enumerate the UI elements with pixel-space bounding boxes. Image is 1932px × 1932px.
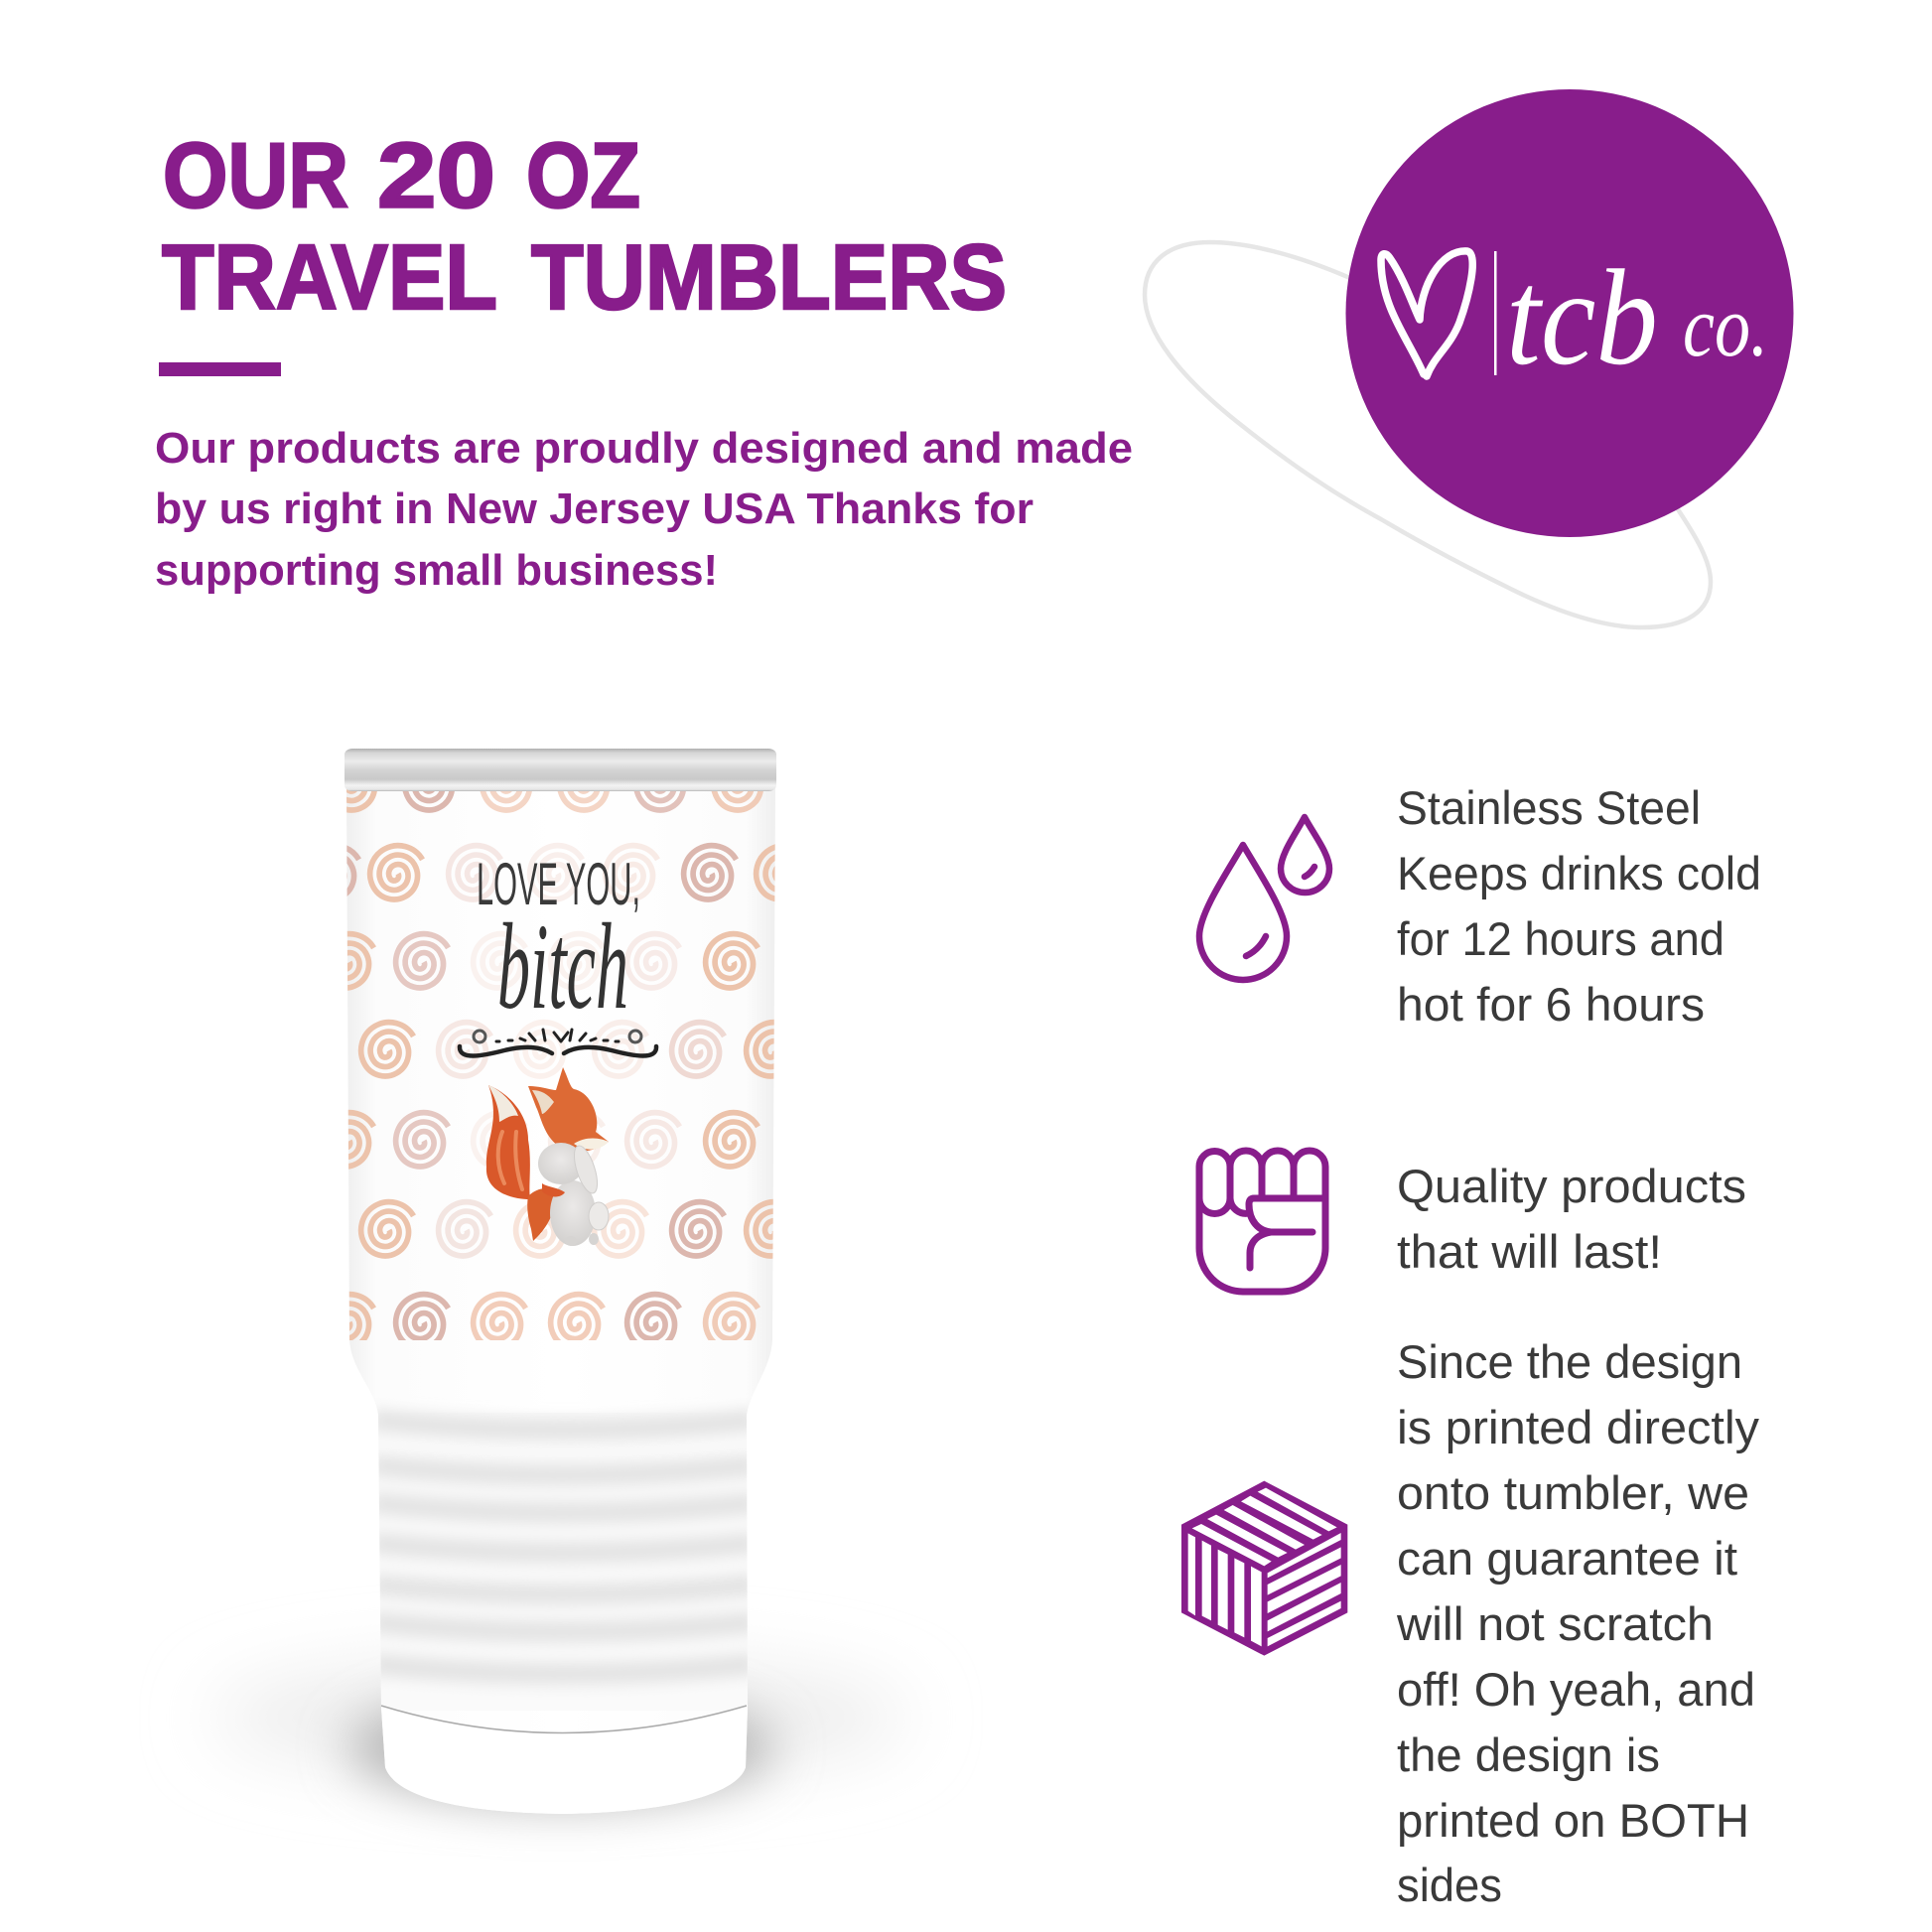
title: OUR (163, 123, 348, 226)
feature text: printed design: will not scratch (1396, 1597, 1714, 1650)
logo divider (1494, 251, 1497, 375)
feature text: stainless steel: Keeps drinks cold (1397, 847, 1761, 899)
ribbed lower section (372, 1413, 755, 1817)
feature text: printed design: Since the design (1397, 1335, 1742, 1388)
fox inner ear (532, 1090, 554, 1114)
design text: love you: LOVE YOU, (477, 851, 640, 917)
fox tail tip (488, 1085, 518, 1122)
ground shadow (213, 1662, 908, 1805)
feature text: printed design: the design is (1397, 1728, 1660, 1781)
intro paragraph: by us right in New Jersey USA Thanks for (155, 484, 1034, 533)
icon: water drops (1199, 817, 1329, 980)
icon: raised fist (1199, 1151, 1325, 1292)
feature text: stainless steel: for 12 hours and (1397, 912, 1725, 965)
tumbler body (346, 787, 775, 1814)
icon: striped cube (1181, 1481, 1347, 1656)
feature text: printed design (1396, 1335, 1760, 1911)
design text: bitch: bitch (497, 898, 628, 1035)
fox head (528, 1067, 609, 1151)
swoosh ring behind logo (1145, 242, 1711, 627)
spiral print pattern (346, 789, 775, 1340)
feature text: quality: Quality products (1397, 1160, 1746, 1212)
feature text: quality (1397, 1160, 1746, 1278)
title underline bar (159, 362, 281, 376)
intro paragraph: Our products are proudly designed and made (155, 424, 1133, 473)
feature text: printed design: sides (1397, 1859, 1502, 1911)
feature text: printed design: is printed directly (1397, 1401, 1760, 1453)
feature text: quality: that will last! (1397, 1225, 1662, 1278)
lid (345, 749, 776, 791)
title: TUMBLERS (531, 225, 1007, 329)
design ornament flourish (460, 1030, 656, 1056)
title: 20 (377, 123, 495, 226)
feature text: printed design: printed on BOTH (1397, 1794, 1749, 1847)
icon: logo heart (1381, 251, 1472, 376)
logo wordmark (1506, 241, 1768, 393)
bunny (538, 1143, 609, 1246)
feature text: printed design: onto tumbler, we (1397, 1466, 1749, 1519)
fox lower body (527, 1188, 556, 1241)
feature text: stainless steel: hot for 6 hours (1397, 978, 1705, 1031)
tumbler illustration (213, 746, 908, 1817)
fox paw (542, 1183, 565, 1196)
intro paragraph: supporting small business! (155, 546, 718, 595)
title (162, 123, 1007, 329)
title: TRAVEL (162, 225, 497, 329)
logo wordmark: tcb (1506, 241, 1658, 393)
title: OZ (526, 123, 640, 226)
feature text: printed design: off! Oh yeah, and (1397, 1663, 1755, 1716)
feature text: stainless steel (1397, 781, 1761, 1031)
feature text: printed design: can guarantee it (1397, 1532, 1737, 1585)
fox tail streaks (498, 1132, 522, 1189)
fox tail (486, 1085, 530, 1199)
fox snout (574, 1138, 609, 1150)
intro paragraph (155, 424, 1133, 595)
logo wordmark: co. (1683, 279, 1768, 375)
feature text: stainless steel: Stainless Steel (1397, 781, 1701, 834)
fox and bunny illustration (486, 1067, 609, 1246)
logo badge (1346, 89, 1793, 537)
